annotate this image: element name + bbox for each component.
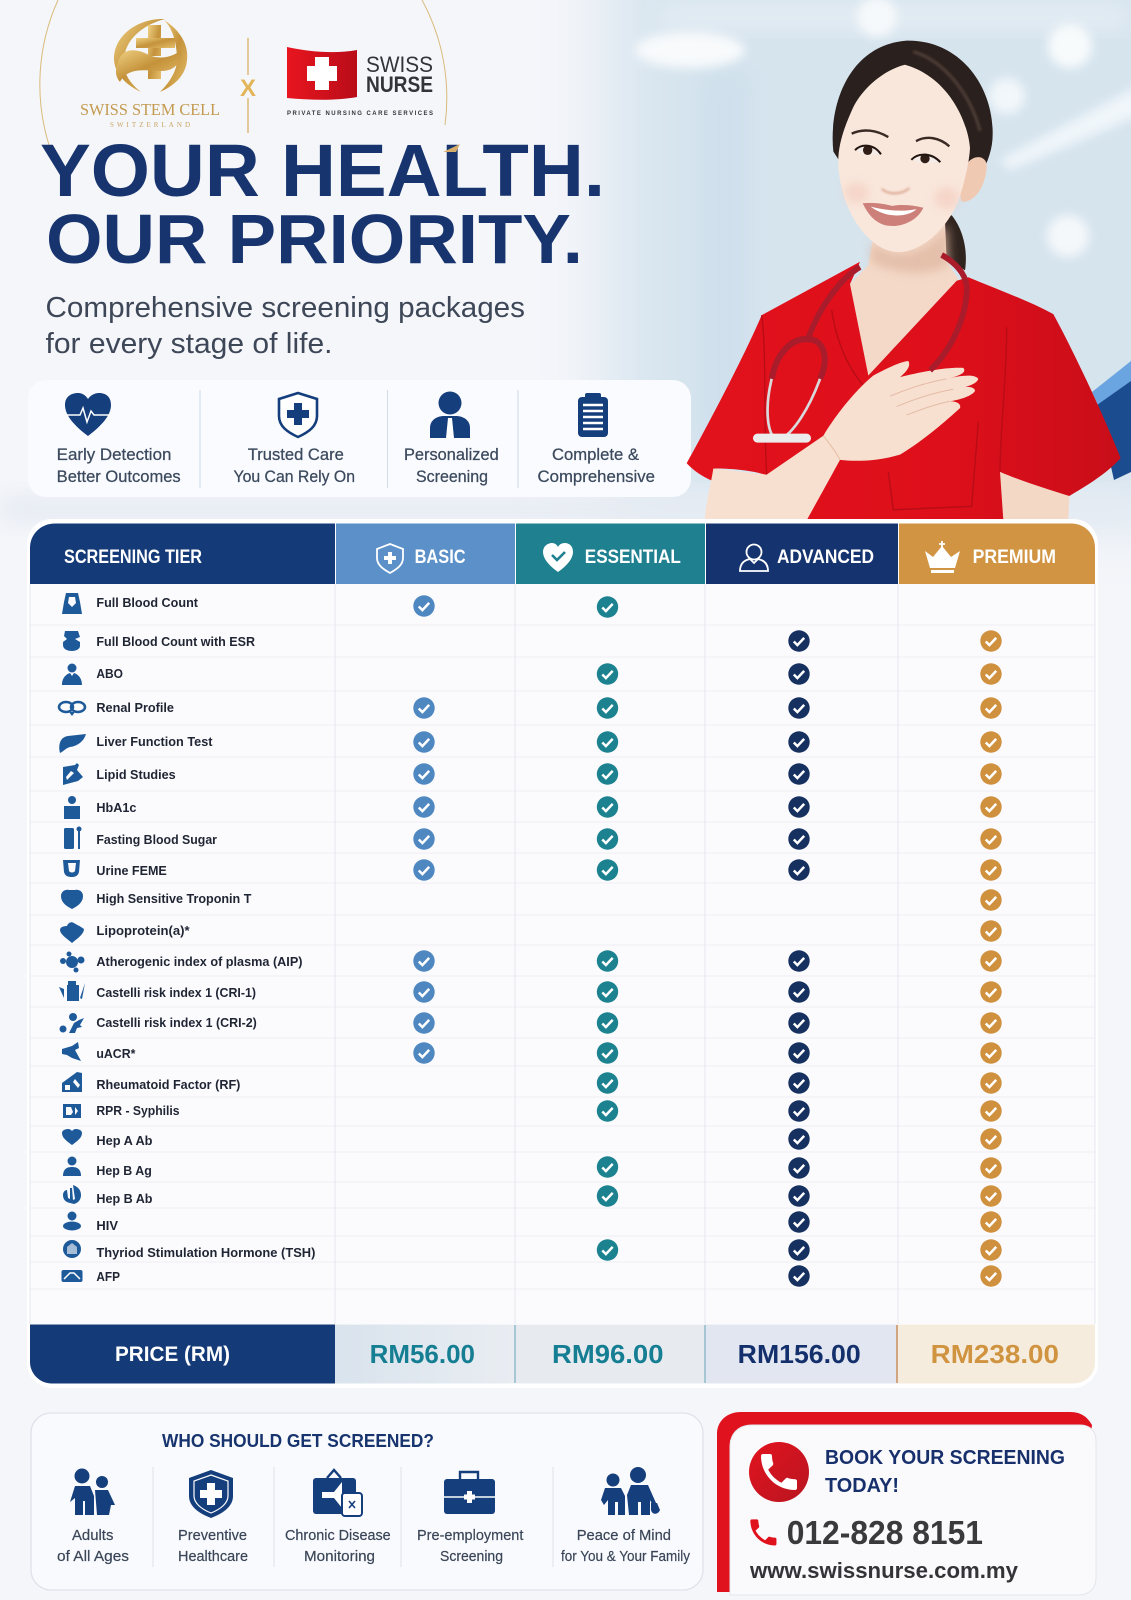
icon: person hands [63, 1212, 81, 1230]
icon: slide [63, 1104, 81, 1118]
subtitle: for every stage of life. [46, 328, 332, 360]
icon: cells [60, 952, 84, 972]
row: High Sensitive Troponin T: High Sensitive Troponin T [96, 891, 251, 906]
header: basic [336, 524, 515, 584]
price label [30, 1324, 335, 1384]
header: screening tier: SCREENING TIER [64, 547, 202, 568]
row: Liver Function Test: Liver Function Test [96, 734, 213, 749]
brand name: SWISS STEM CELL [80, 100, 220, 119]
icon: family [601, 1467, 660, 1515]
header: essential [516, 524, 705, 584]
skin right arm [1000, 472, 1069, 520]
blue swoosh [1092, 361, 1131, 480]
benefit: early detection: Better Outcomes [57, 468, 181, 486]
icon: shield with cross [279, 393, 317, 437]
title [40, 129, 605, 278]
phone number: 012-828 8151 [787, 1514, 983, 1551]
icon: lipid flask [63, 763, 83, 785]
scrub folds [762, 310, 1007, 510]
icon: heart with pulse [65, 393, 111, 436]
face [838, 65, 970, 252]
subtitle: Comprehensive screening packages [46, 292, 525, 324]
audience: adults [57, 1468, 129, 1565]
price: advanced: RM156.00 [738, 1339, 861, 1369]
header: advanced: ADVANCED [777, 547, 874, 568]
website: www.swissnurse.com.my [749, 1558, 1019, 1583]
row: Hep B Ab: Hep B Ab [96, 1191, 153, 1206]
icon: kidneys [59, 702, 85, 716]
audience: family: Peace of Mind [577, 1527, 671, 1544]
audience: family: for You & Your Family [561, 1548, 690, 1565]
icon: thyroid globe [63, 1240, 81, 1258]
price: essential: RM96.00 [552, 1339, 664, 1369]
icon: phone circle [749, 1442, 809, 1502]
logo: Swiss Nurse: SWISS [366, 52, 433, 77]
row: Lipid Studies: Lipid Studies [96, 767, 176, 782]
icon: Swiss flag [287, 47, 357, 100]
panel: benefits [28, 380, 691, 497]
row: Hep A Ab [62, 1128, 1002, 1150]
logo arc [40, 0, 447, 145]
white card [730, 1425, 1096, 1595]
benefit: trusted care: You Can Rely On [234, 468, 355, 486]
row: Full Blood Count [62, 593, 618, 618]
call to action heading: TODAY! [825, 1475, 899, 1497]
row: Renal Profile: Renal Profile [96, 700, 174, 715]
icon: joint [62, 1072, 82, 1092]
row: RPR - Syphilis [63, 1100, 1002, 1122]
price: premium [897, 1324, 1095, 1384]
cheek blush [844, 183, 959, 209]
row: Lipoprotein(a)* [60, 920, 1002, 943]
price: essential [515, 1324, 705, 1384]
row: Fasting Blood Sugar [64, 826, 1002, 850]
row: Lipoprotein(a)*: Lipoprotein(a)* [96, 923, 191, 938]
header: advanced [706, 524, 898, 584]
row: Renal Profile [59, 697, 1002, 719]
mouth [863, 203, 923, 226]
panel: call to action [717, 1412, 1096, 1595]
row: HIV [63, 1211, 1002, 1233]
row: Castelli risk index 1 (CRI-2) [60, 1012, 1002, 1034]
stethoscope [757, 255, 967, 439]
neck shadow [871, 224, 949, 273]
audience: chronic disease [285, 1470, 391, 1565]
row: HIV: HIV [96, 1218, 118, 1233]
row: Castelli risk index 1 (CRI-1): Castelli risk index 1 (CRI-1) [96, 985, 256, 1000]
icon: tube [64, 826, 82, 849]
icon: kidney splash [62, 1042, 81, 1061]
icon: heart virus [62, 1129, 82, 1145]
call to action heading: BOOK YOUR SCREENING [825, 1447, 1065, 1469]
icon: urine cup [63, 860, 80, 877]
row: Hep B Ag: Hep B Ag [96, 1163, 152, 1178]
heading: WHO SHOULD GET SCREENED? [162, 1431, 434, 1451]
row: Thyriod Stimulation Hormone (TSH): Thyriod Stimulation Hormone (TSH) [96, 1245, 315, 1260]
audience: pre-employment: Screening [440, 1548, 503, 1565]
icon: person with tie [430, 392, 470, 438]
row: Fasting Blood Sugar: Fasting Blood Sugar [96, 832, 217, 847]
icon: shield [189, 1470, 233, 1518]
header: premium: PREMIUM [973, 547, 1056, 568]
benefit: trusted care [234, 393, 355, 486]
row: uACR*: uACR* [96, 1046, 136, 1061]
logo: Swiss Nurse [287, 47, 433, 117]
row: uACR* [62, 1042, 1002, 1064]
ear [960, 157, 987, 202]
row: HbA1c [64, 796, 1002, 819]
benefit: complete: Complete & [552, 446, 639, 464]
audience: chronic disease: Chronic Disease [285, 1527, 391, 1544]
row: Castelli risk index 1 (CRI-2): Castelli risk index 1 (CRI-2) [96, 1015, 257, 1030]
benefit: early detection: Early Detection [57, 446, 171, 464]
call to action heading [825, 1447, 1065, 1497]
ponytail [940, 215, 966, 270]
audience: preventive: Healthcare [178, 1548, 248, 1565]
title: YOUR HEALTH. [40, 129, 605, 212]
scrubs [687, 262, 1121, 520]
row: AFP [62, 1265, 1002, 1287]
icon: figure with arms [59, 981, 85, 1001]
row: Liver Function Test [59, 731, 1002, 753]
row: Atherogenic index of plasma (AIP): Atherogenic index of plasma (AIP) [96, 954, 303, 969]
icon: person [62, 664, 82, 685]
icon: red handset [750, 1519, 776, 1545]
header: screening tier [30, 524, 335, 584]
icon: medical bag with jar [313, 1470, 362, 1516]
price: premium: RM238.00 [931, 1339, 1059, 1369]
forearm and hand [705, 361, 978, 520]
icon: heart split [60, 922, 84, 943]
logo: Swiss Stem Cell [80, 19, 220, 129]
title: OUR PRIORITY. [46, 200, 583, 278]
hair [833, 41, 993, 179]
row: Hep B Ab [63, 1185, 1002, 1207]
red frame [717, 1412, 1092, 1592]
icon: heart chip [61, 890, 83, 909]
row: Hep A Ab: Hep A Ab [96, 1133, 153, 1148]
row: Lipid Studies [63, 763, 1002, 785]
table grid lines [30, 584, 1095, 1324]
row: ABO [62, 663, 1002, 685]
audience: adults: Adults [72, 1527, 113, 1544]
row: HbA1c: HbA1c [96, 800, 136, 815]
row: Full Blood Count with ESR: Full Blood Count with ESR [96, 634, 256, 649]
icon: battery clipboard [578, 393, 608, 437]
logo: Swiss Nurse: PRIVATE NURSING CARE SERVICES [287, 111, 433, 117]
benefit: complete: Comprehensive [538, 468, 655, 486]
audience: pre-employment [417, 1472, 524, 1565]
table card [27, 519, 1098, 1388]
row: RPR - Syphilis: RPR - Syphilis [96, 1103, 180, 1118]
table header [30, 524, 1095, 584]
icon: gold cross swirl [114, 19, 187, 92]
header: basic: BASIC [415, 547, 466, 568]
row: High Sensitive Troponin T [61, 889, 1002, 911]
row: Urine FEME: Urine FEME [96, 863, 167, 878]
benefit: early detection [57, 393, 181, 486]
icon: molecules [60, 1013, 84, 1033]
price row [30, 1324, 1095, 1384]
price: advanced [705, 1324, 897, 1384]
brand location: SWITZERLAND [110, 121, 190, 129]
row: AFP: AFP [96, 1269, 120, 1284]
row: Urine FEME [63, 859, 1002, 881]
benefit: personalized: Screening [416, 468, 488, 486]
row: Atherogenic index of plasma (AIP) [60, 950, 1002, 972]
row: Full Blood Count: Full Blood Count [96, 595, 199, 610]
price: basic [335, 1324, 515, 1384]
audience: preventive [178, 1470, 248, 1565]
audience: adults: of All Ages [57, 1548, 129, 1565]
benefit: personalized: Personalized [404, 446, 499, 464]
logo: Swiss Nurse: NURSE [366, 72, 433, 97]
row: Rheumatoid Factor (RF): Rheumatoid Factor (RF) [96, 1077, 240, 1092]
icon: drop stack [63, 631, 80, 651]
benefit: complete [538, 393, 655, 486]
row: Castelli risk index 1 (CRI-1) [59, 981, 1002, 1003]
benefit: personalized [404, 392, 499, 486]
nurse illustration [687, 41, 1121, 520]
icon: adults [70, 1468, 115, 1515]
row: ABO: ABO [96, 666, 123, 681]
logo divider and X [240, 38, 256, 133]
icon: doctor [63, 1156, 81, 1176]
icon: envelope [62, 1270, 82, 1282]
header: essential: ESSENTIAL [585, 547, 681, 568]
icon: antibody [63, 1185, 81, 1204]
icon: vial figure [64, 796, 80, 819]
audience: chronic disease: Monitoring [304, 1548, 375, 1565]
eyebrows [852, 130, 949, 146]
logo divider and X: X [240, 75, 256, 102]
neck [850, 220, 958, 375]
price label: PRICE (RM) [115, 1343, 230, 1366]
eyes [855, 145, 940, 163]
row: Thyriod Stimulation Hormone (TSH) [63, 1239, 1002, 1261]
panel: who should get screened [31, 1413, 703, 1590]
benefit: trusted care: Trusted Care [248, 446, 344, 464]
subtitle [46, 292, 525, 360]
icon: test [62, 593, 82, 614]
row: Rheumatoid Factor (RF) [62, 1072, 1002, 1094]
row: Full Blood Count with ESR [63, 630, 1002, 652]
audience: preventive: Preventive [178, 1527, 247, 1544]
price: basic: RM56.00 [370, 1339, 475, 1369]
row: Hep B Ag [63, 1156, 1002, 1179]
icon: briefcase [444, 1472, 495, 1514]
header: premium [899, 524, 1095, 584]
icon: liver [59, 734, 86, 753]
audience: family [561, 1467, 690, 1565]
nose [882, 188, 909, 193]
audience: pre-employment: Pre-employment [417, 1527, 524, 1544]
